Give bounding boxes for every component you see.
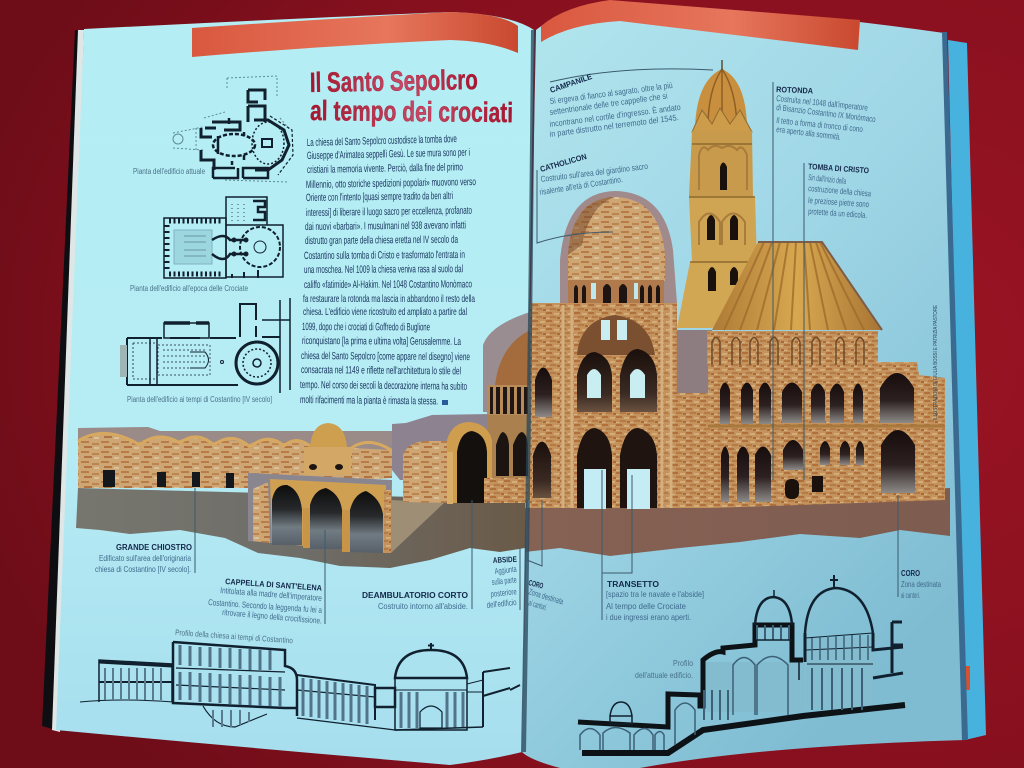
- caption: present plan: Pianta dell'edificio attuale: [133, 167, 205, 176]
- label: Coro left: CORO: [528, 578, 544, 591]
- label: Campanile: incontrano nel cortile d'ingresso. È andato: [549, 102, 681, 129]
- caption: Crusader plan: Pianta dell'edificio all'epoca delle Crociate: [130, 284, 248, 293]
- label: Campanile: settentrionale delle tre cappelle che si: [549, 91, 668, 117]
- body text: califfo «fatimide» Al-Hakim. Nel 1048 Costantino Monòmaco: [304, 278, 472, 291]
- label: Tomba di Cristo: Sin dall'inizio della: [808, 172, 847, 186]
- body text: tempo. Nel corso dei secoli la decorazione interna ha subito: [300, 379, 467, 393]
- red band, left page: [192, 12, 518, 57]
- rotunda: conical roof: [712, 242, 882, 330]
- label: Campanile: [549, 69, 713, 139]
- body text: distrutto gran parte della chiesa eretta nel IV secolo da: [305, 234, 458, 247]
- body text: riconquistano [la prima e ultima volta] Gerusalemme. La: [302, 335, 461, 348]
- right page: [522, 3, 965, 768]
- body text: [300, 133, 476, 407]
- label: Tomba di Cristo: protette da un edicola.: [808, 206, 867, 220]
- label: Tomba di Cristo: TOMBA DI CRISTO: [808, 162, 869, 175]
- small dome over chapel: [304, 423, 351, 475]
- label: Catholicon: [537, 152, 649, 243]
- body text: consacrata nel 1149 e riflette nell'architettura lo stile del: [301, 364, 461, 377]
- label: Coro left: [527, 500, 565, 612]
- label: Coro right: [898, 495, 941, 600]
- label: Coro right: Zona destinata: [901, 579, 941, 589]
- red band, right page: [541, 0, 860, 50]
- semi-dome left of catholicon: [483, 312, 530, 415]
- body text: 1099, dopo che i crociati di Goffredo di Buglione: [302, 321, 430, 333]
- transition wall and Short Ambulatory: [392, 412, 531, 504]
- caption: Constantine plan: Pianta dell'edificio ai tempi di Costantino [IV secolo]: [127, 395, 272, 404]
- label: Transetto: [spazio tra le navate e l'abside]: [606, 589, 704, 599]
- label: Abside: ABSIDE: [493, 555, 518, 565]
- label: Cappella di Sant'Elena: ritrovare il legno della crocifissione.: [222, 607, 322, 626]
- mauve wall beside rotunda: [673, 330, 712, 393]
- tower: bell tower: [677, 60, 757, 328]
- rotunda: wall with arches: [673, 331, 945, 508]
- label: Campanile: in parte distrutto nel terremoto del 1545.: [549, 112, 679, 139]
- label: Coro right: CORO: [901, 569, 920, 578]
- label: Campanile: CAMPANILE: [549, 72, 594, 95]
- label: Rotonda: ROTONDA: [776, 85, 813, 96]
- chapel of Saint Helena: [248, 473, 444, 553]
- body text: cristiani la memoria vivente. Perciò, dalla fine del primo: [307, 161, 463, 176]
- label: Cappella di Sant'Elena: [208, 530, 325, 626]
- label: Coro left: ai cantori.: [527, 597, 549, 612]
- label: Deambulatorio corto: [362, 500, 472, 611]
- label: Grande Chiostro: [95, 488, 195, 574]
- label: Tomba di Cristo: costruzione della chiesa: [808, 183, 872, 198]
- body text: una moschea. Nel 1009 la chiesa veniva rasa al suolo dal: [304, 263, 463, 276]
- label: Transetto: Al tempo delle Crociate: [606, 601, 686, 611]
- vertical credit: ILLUSTRAZIONI DI GIULIA BOSSI E PATRIZIA PASTORE: [933, 305, 939, 420]
- body text: La chiesa del Santo Sepolcro custodisce la tomba dove: [307, 133, 457, 149]
- label: Abside: posteriore: [490, 586, 517, 599]
- label: Abside: sulla parte: [491, 574, 517, 587]
- plan: Crusader era: [164, 197, 283, 278]
- right page edge: [942, 32, 968, 740]
- body text: fa restaurare la rotonda ma lascia in abbandono il resto della: [303, 293, 475, 305]
- label: Abside: [486, 548, 520, 610]
- plan: present building: [173, 76, 293, 182]
- body text: molti rifacimenti ma la pianta è rimasta la stessa.: [300, 394, 438, 407]
- label: Grande Chiostro: Edificato sull'area dell'originaria: [99, 553, 191, 563]
- body text: interessi] di liberare il luogo sacro per eccellenza, profanato: [306, 205, 472, 219]
- label: Catholicon: risalente all'età di Costantino.: [539, 174, 623, 197]
- label: Transetto: [602, 470, 704, 622]
- title: Il Santo Sepolcro: [310, 64, 478, 98]
- label: Grande Chiostro: GRANDE CHIOSTRO: [116, 543, 192, 552]
- label: Coro left: Zona destinata: [527, 586, 565, 606]
- ground strip left: [76, 488, 525, 568]
- label: Cappella di Sant'Elena: Costantino. Secondo la leggenda fu lei a: [208, 597, 322, 615]
- caption: Constantine profile: Profilo della chiesa ai tempi di Costantino: [175, 628, 294, 645]
- title: [310, 64, 513, 128]
- label: Campanile: Si ergeva di fianco al sagrato, oltre la più: [549, 80, 673, 106]
- label: Coro right: ai cantori.: [901, 590, 920, 600]
- label: Rotonda: Costruita nel 1048 dall'imperatore: [776, 93, 869, 113]
- label: Abside: dell'edificio: [486, 597, 517, 610]
- label: Transetto: TRANSETTO: [607, 580, 659, 589]
- caption: present profile: [635, 659, 693, 680]
- body text: Oriente con l'intento [quasi sempre tradito da ben altri: [306, 190, 453, 204]
- profile drawing: present building: [578, 575, 905, 753]
- caption: present profile: dell'attuale edificio.: [635, 671, 693, 680]
- label: Abside: Aggiunta: [494, 564, 517, 576]
- label: Rotonda: di Bisanzio Costantino IX Monòmaco: [776, 102, 876, 124]
- body text: dai nuovi «barbari». I musulmani nel 938 avevano infatti: [305, 219, 466, 233]
- label: Tomba di Cristo: [804, 162, 872, 480]
- plan: Constantine era: [120, 298, 290, 393]
- label: Grande Chiostro: chiesa di Costantino [IV secolo].: [95, 564, 191, 574]
- label: Cappella di Sant'Elena: Intitolata alla madre dell'imperatore: [220, 585, 323, 603]
- label: Tomba di Cristo: le preziose pietre sono: [808, 195, 870, 209]
- body text: Costantino sulla tomba di Cristo e trasformato l'entrata in: [304, 249, 465, 262]
- label: Deambulatorio corto: DEAMBULATORIO CORTO: [362, 591, 468, 600]
- book gutter shadow: [521, 30, 535, 752]
- catholicon: dome: [560, 191, 677, 304]
- label: Cappella di Sant'Elena: CAPPELLA DI SANT'ELENA: [225, 577, 322, 593]
- left page: [56, 12, 534, 765]
- body text: chiesa del Santo Sepolcro [come appare nel disegno] viene: [301, 350, 470, 363]
- body text: Giuseppe d'Arimatea seppellì Gesù. Le sue mura sono per i: [307, 147, 470, 162]
- body text: Millennio, otto storiche spedizioni popolari» muovono verso: [306, 176, 476, 191]
- section drawing: great cloister: [78, 427, 394, 488]
- label: Transetto: i due ingressi erano aperti.: [606, 612, 691, 622]
- title: al tempo dei crociati: [310, 95, 513, 128]
- catholicon: body with arches and windows: [530, 303, 677, 509]
- label: Rotonda: era aperto alla sommità.: [776, 124, 841, 142]
- label: Rotonda: Il tetto a forma di tronco di cono: [776, 115, 864, 134]
- label: Rotonda: [773, 82, 876, 480]
- profile drawing: Constantine church: [80, 642, 520, 730]
- ground strip right: [525, 488, 950, 556]
- caption: present profile: Profilo: [673, 659, 693, 668]
- label: Deambulatorio corto: Costruito intorno all'abside.: [378, 601, 468, 611]
- body text: chiesa. L'edificio viene ricostruito ed ampliato a partire dal: [303, 306, 467, 318]
- label: Catholicon: CATHOLICON: [539, 152, 588, 174]
- label: Catholicon: Costruito sull'area del giardino sacro: [540, 161, 649, 184]
